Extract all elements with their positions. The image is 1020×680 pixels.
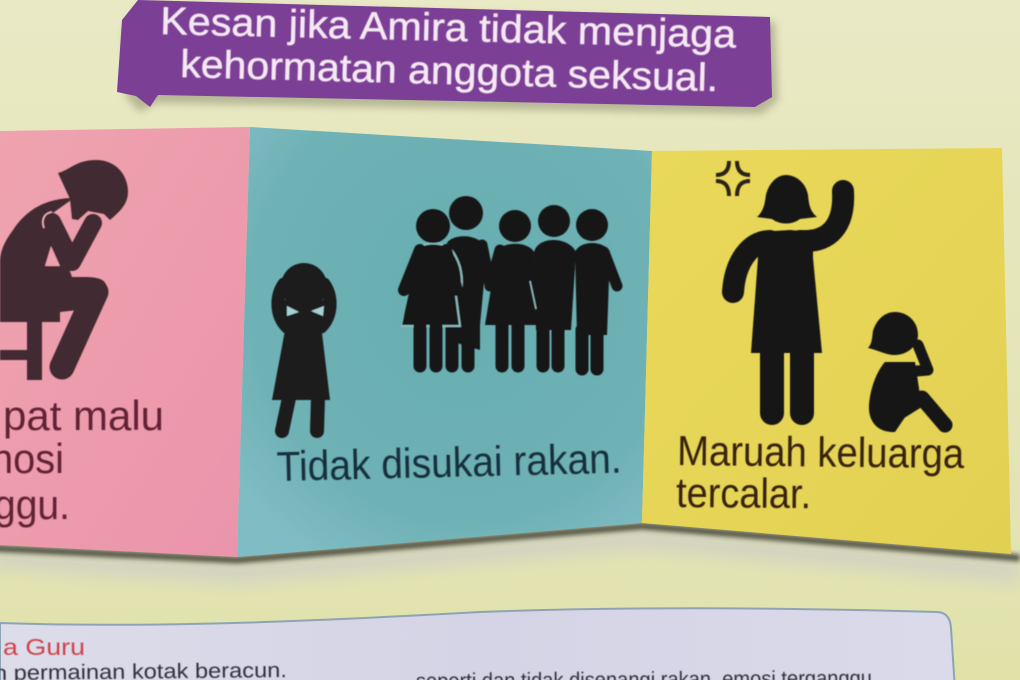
panel shadow bbox=[0, 526, 1020, 572]
caption: pink: pat malu bbox=[3, 392, 164, 439]
icon: anger mark bbox=[716, 161, 750, 196]
caption: yellow: Maruah keluarga bbox=[677, 427, 965, 477]
note text bbox=[0, 659, 872, 680]
figure: woman left bbox=[402, 209, 462, 366]
caption: pink bbox=[0, 392, 164, 528]
icon: group of friends bbox=[402, 196, 617, 369]
caption: blue: Tidak disukai rakan. bbox=[276, 435, 622, 490]
icon: crying child bbox=[272, 263, 330, 431]
panel: pink bbox=[0, 127, 250, 557]
heading text bbox=[160, 0, 737, 100]
caption: yellow bbox=[676, 427, 965, 517]
figure: man second from right bbox=[534, 205, 576, 366]
caption: yellow: tercalar. bbox=[676, 469, 811, 517]
figure: woman centre bbox=[485, 210, 538, 366]
icon: seated person holding head bbox=[0, 160, 128, 380]
heading text: kehormatan anggota seksual. bbox=[180, 43, 719, 100]
figure: man behind bbox=[447, 196, 490, 366]
icon: sitting child bbox=[868, 312, 945, 432]
panel: yellow bbox=[642, 148, 1011, 554]
icon: scolding mother bbox=[733, 175, 843, 413]
panel: blue bbox=[237, 127, 652, 557]
heading banner bbox=[117, 0, 778, 114]
figure: man at right bbox=[575, 209, 617, 369]
note heading: a Guru bbox=[3, 634, 85, 660]
panel: teacher note bbox=[0, 608, 955, 680]
heading text: Kesan jika Amira tidak menjaga bbox=[160, 0, 737, 57]
